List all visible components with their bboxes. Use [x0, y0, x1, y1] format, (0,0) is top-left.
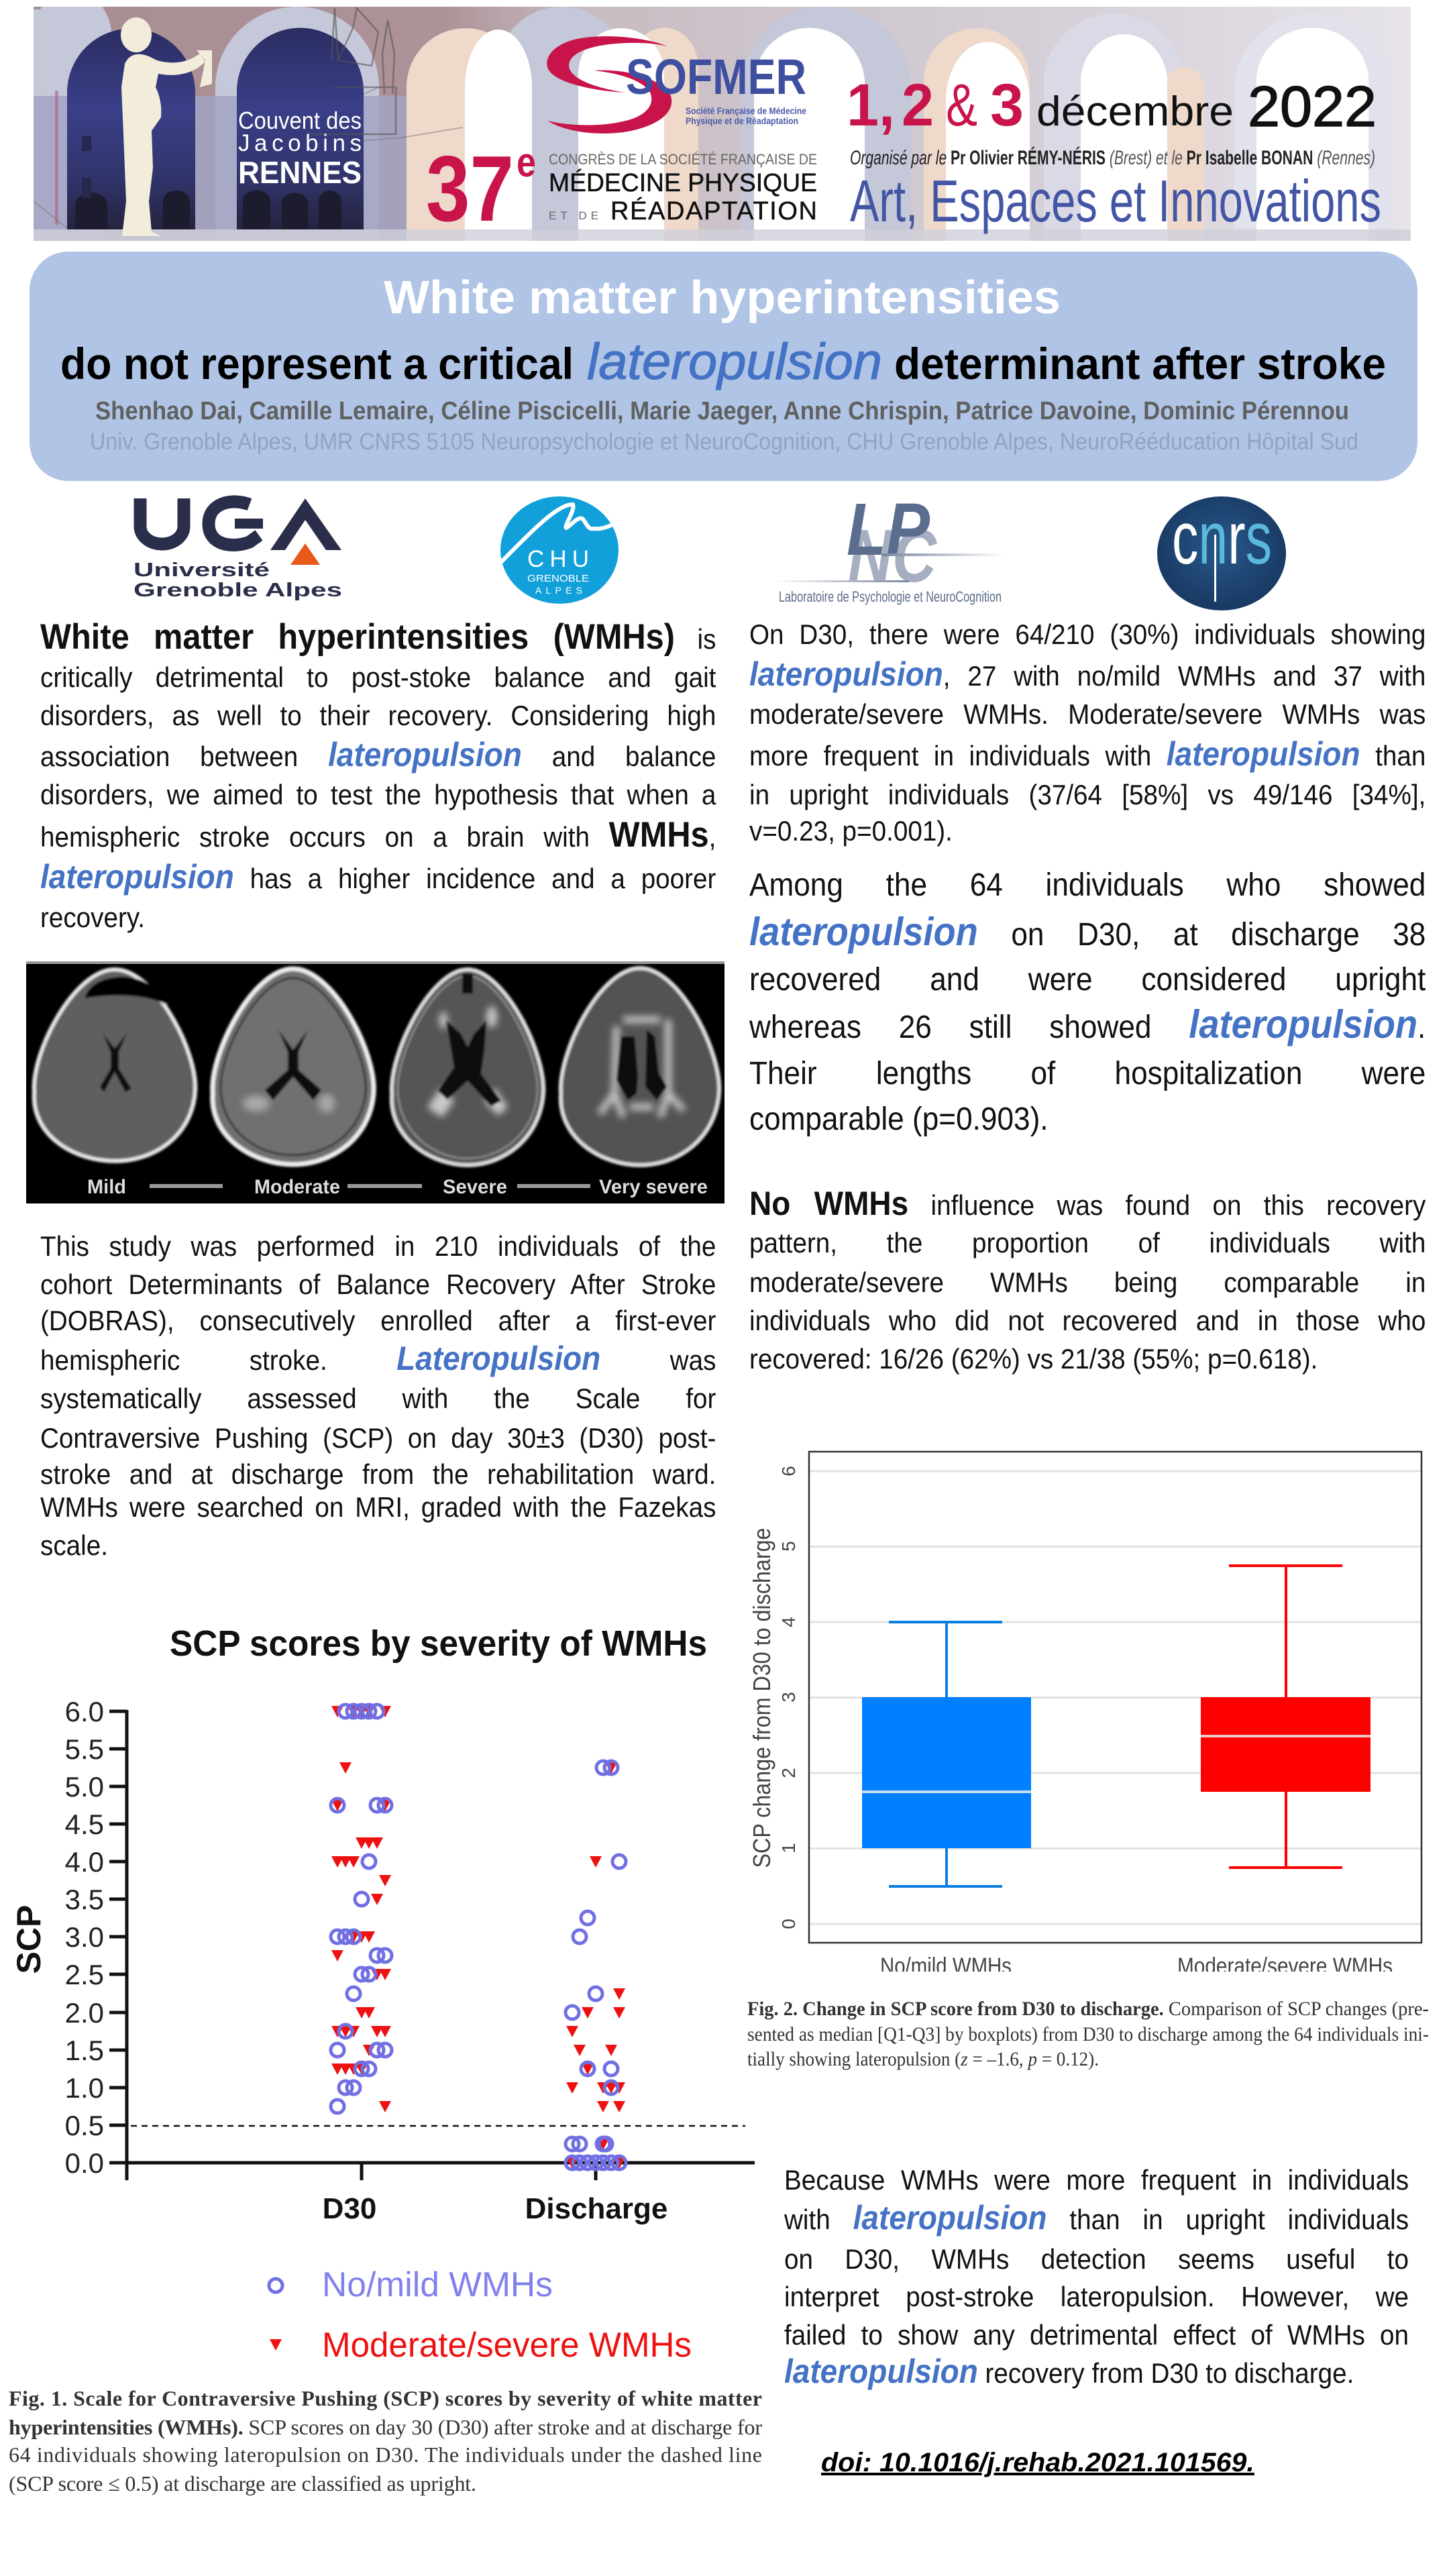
axis labels: 6 — [778, 1466, 799, 1477]
text block: conclusion: on D30, WMHs detection seems useful to — [784, 2243, 1409, 2275]
y tick labels: 5.5 — [65, 1733, 104, 1765]
axis labels: SCP change from D30 to discharge — [748, 1528, 775, 1868]
y tick labels: 4.0 — [65, 1846, 104, 1878]
y tick labels: 2.5 — [65, 1959, 104, 1990]
axes — [109, 1710, 755, 2180]
markers: no/mild — [331, 1705, 626, 2169]
logo: CHU Grenoble Alpes — [500, 496, 619, 604]
logo: UGA: Grenoble Alpes — [133, 580, 342, 601]
chart: boxplot SCP change — [747, 1450, 1429, 2070]
text block: introduction: recovery. — [40, 902, 145, 933]
text: 37e: e — [517, 140, 536, 186]
text: congress name — [549, 151, 817, 225]
legend — [269, 2265, 692, 2365]
text block: introduction — [40, 617, 716, 933]
text block: methods — [40, 1230, 716, 1561]
text: congress name: CONGRÈS DE LA SOCIÉTÉ FRANÇAISE DE — [549, 151, 817, 168]
logo: CHU Grenoble Alpes: ALPES — [535, 585, 582, 596]
y tick labels — [65, 1696, 104, 2179]
text block: results discharge: Among the 64 individuals who showed — [749, 867, 1426, 903]
x labels: Discharge — [525, 2192, 667, 2225]
text block: results discharge: recovered and were considered upright — [749, 962, 1426, 998]
y tick labels: 4.5 — [65, 1809, 104, 1840]
text: congress name: RÉADAPTATION — [610, 197, 817, 225]
text block: no WMHs influence: moderate/severe WMHs being comparable in — [749, 1267, 1426, 1298]
icon: statue — [121, 17, 212, 236]
text: dates: 3 — [990, 71, 1024, 138]
labels and arrows: Severe — [443, 1176, 507, 1198]
markers: moderate/severe — [331, 1706, 625, 2169]
text block: introduction: critically detrimental to post-stoke balance and gait — [40, 661, 716, 693]
text block: results D30: v=0.23, p=0.001). — [749, 815, 953, 847]
logo: LPNC — [779, 496, 1002, 605]
text block: conclusion — [784, 2164, 1409, 2390]
text block: methods: Contraversive Pushing (SCP) on day 30±3 (D30) post- — [40, 1422, 716, 1454]
y tick labels: 0.0 — [65, 2147, 104, 2179]
text block: introduction: disorders, as well to their recovery. Considering high — [40, 700, 716, 731]
brain: very severe — [561, 968, 719, 1165]
logo: UGA: Université — [133, 559, 270, 581]
text: congress name: ET DE — [549, 209, 598, 222]
logo: CNRS — [1157, 496, 1286, 610]
text block: methods: WMHs were searched on MRI, graded with the Fazekas — [40, 1491, 716, 1523]
text block: conclusion: interpret post-stroke lateropulsion. However, we — [784, 2281, 1409, 2312]
text block: no WMHs influence: No WMHs influence was found on this recovery — [749, 1185, 1426, 1222]
text block: methods: cohort Determinants of Balance Recovery After Stroke — [40, 1269, 716, 1300]
logo: SOFMER — [547, 36, 806, 133]
heading line 2 — [60, 333, 1386, 390]
text block: results discharge — [749, 867, 1426, 1137]
box: no/mild — [862, 1622, 1031, 1886]
icon: dark arches — [67, 28, 364, 229]
text block: conclusion: Because WMHs were more frequent in individuals — [784, 2164, 1409, 2196]
labels and arrows: Moderate — [254, 1176, 340, 1198]
text: dates: 1, — [847, 71, 895, 138]
logo: UGA — [133, 495, 342, 601]
caption: figure 2: Fig. 2. Change in SCP score from D30 to discharge. Comparison of SCP changes (pre- — [747, 1998, 1429, 2020]
peach arches — [407, 28, 1204, 241]
axis labels: 4 — [778, 1617, 799, 1627]
labels and arrows: Mild — [87, 1176, 126, 1198]
axis labels: Moderate/severe WMHs — [1177, 1953, 1393, 1979]
logo: CNRS: cnrs — [1172, 497, 1272, 580]
axis labels: 1 — [778, 1843, 799, 1854]
y tick labels: 2.0 — [65, 1997, 104, 2029]
text block: results discharge: comparable (p=0.903). — [749, 1102, 1049, 1137]
text block: no WMHs influence: individuals who did not recovered and in those who — [749, 1305, 1426, 1336]
axis labels: 2 — [778, 1768, 799, 1778]
figure: MRI Fazekas severity scale — [26, 961, 724, 1203]
x labels — [323, 2192, 667, 2225]
caption: figure 2: tially showing lateropulsion (z = –1.6, p = 0.12). — [747, 2048, 1099, 2070]
y tick labels: 5.0 — [65, 1771, 104, 1803]
caption: figure 1: Fig. 1. Scale for Contraversive Pushing (SCP) scores by severity of white matter — [9, 2386, 762, 2410]
caption: figure 1: hyperintensities (WMHs). SCP scores on day 30 (D30) after stroke and at discharge for — [9, 2415, 762, 2439]
text block: no WMHs influence: pattern, the proportion of individuals with — [749, 1227, 1426, 1258]
panel: title — [30, 252, 1417, 481]
text: dates — [847, 71, 1377, 139]
text block: no WMHs influence — [749, 1185, 1426, 1375]
caption: figure 2 — [747, 1998, 1429, 2070]
legend: No/mild WMHs — [322, 2265, 553, 2304]
heading line 2: lateropulsion — [587, 333, 882, 390]
text block: no WMHs influence: recovered: 16/26 (62%) vs 21/38 (55%; p=0.618). — [749, 1343, 1318, 1375]
text block: results D30: lateropulsion, 27 with no/mild WMHs and 37 with — [749, 655, 1426, 693]
brain: moderate — [213, 969, 374, 1165]
y tick labels: 3.0 — [65, 1921, 104, 1953]
brain: severe — [392, 969, 543, 1165]
logo: SOFMER: Société Française de Médecine — [686, 105, 806, 116]
affiliations: Univ. Grenoble Alpes, UMR CNRS 5105 Neuropsychologie et NeuroCognition, CHU Grenoble Alpes, NeuroRééducation Hôpital Sud — [90, 429, 1358, 455]
text block: introduction: association between lateropulsion and balance — [40, 736, 716, 773]
axis labels: No/mild WMHs — [880, 1953, 1012, 1979]
text block: introduction: disorders, we aimed to test the hypothesis that when a — [40, 779, 716, 810]
text block: conclusion: lateropulsion recovery from D30 to discharge. — [784, 2353, 1354, 2390]
text block: results D30: more frequent in individuals with lateropulsion than — [749, 735, 1426, 773]
text block: results D30 — [749, 619, 1426, 847]
logo: SOFMER: SOFMER — [626, 49, 806, 105]
text block: conclusion: failed to show any detrimental effect of WMHs on — [784, 2319, 1409, 2351]
logo: CHU Grenoble Alpes: CHU — [527, 546, 589, 572]
heading line 2: do not represent a critical — [60, 339, 574, 388]
axis labels: 0 — [778, 1919, 799, 1929]
chart: SCP scatter — [9, 1623, 762, 2496]
text: dates: décembre — [1036, 89, 1234, 135]
labels and arrows — [87, 1176, 708, 1198]
logo: SOFMER: Physique et de Réadaptation — [686, 115, 798, 126]
text block: introduction: hemispheric stroke occurs on a brain with WMHs, — [40, 815, 716, 855]
text block: methods: hemispheric stroke. Lateropulsion was — [40, 1340, 716, 1377]
banner: SOFMER congress — [34, 7, 1411, 241]
text block: results discharge: Their lengths of hospitalization were — [749, 1056, 1426, 1091]
axis labels — [748, 1466, 1393, 1979]
text block: methods: systematically assessed with the Scale for — [40, 1383, 716, 1414]
text: 37e: 37 — [426, 137, 514, 241]
caption: figure 1: (SCP score ≤ 0.5) at discharge are classified as upright. — [9, 2471, 476, 2496]
white arches — [465, 28, 1368, 241]
text block: methods: stroke and at discharge from the rehabilitation ward. — [40, 1458, 716, 1490]
text block: methods: scale. — [40, 1529, 108, 1561]
heading line 1: White matter hyperintensities — [384, 271, 1061, 323]
caption: figure 1: 64 individuals showing lateropulsion on D30. The individuals under the dashed line — [9, 2443, 762, 2467]
y tick labels: 1.0 — [65, 2072, 104, 2104]
text: congress name: MÉDECINE PHYSIQUE — [549, 168, 817, 197]
y tick labels: 1.5 — [65, 2035, 104, 2066]
text block: methods: This study was performed in 210 individuals of the — [40, 1230, 716, 1262]
text: organisers: Organisé par le Pr Olivier RÉMY-NÉRIS (Brest) et le Pr Isabelle BONAN (Rennes) — [850, 146, 1375, 169]
text block: results D30: moderate/severe WMHs. Moderate/severe WMHs was — [749, 698, 1426, 730]
brain: mild — [34, 969, 195, 1161]
text: dates: 2 — [902, 71, 934, 138]
text block: results D30: On D30, there were 64/210 (30%) individuals showing — [749, 619, 1426, 650]
axis labels: 3 — [778, 1692, 799, 1703]
axis labels: 5 — [778, 1541, 799, 1552]
caption: figure 1 — [9, 2386, 762, 2496]
labels and arrows: Very severe — [599, 1176, 708, 1198]
legend: Moderate/severe WMHs — [322, 2326, 692, 2365]
text: dates: 2022 — [1248, 75, 1377, 139]
authors: Shenhao Dai, Camille Lemaire, Céline Piscicelli, Marie Jaeger, Anne Chrispin, Patrice Davoine, Dominic Pérennou — [95, 397, 1349, 425]
chart title: SCP scores by severity of WMHs — [170, 1623, 707, 1664]
text: DOI reference: doi: 10.1016/j.rehab.2021.101569. — [821, 2448, 1254, 2477]
text block: conclusion: with lateropulsion than in upright individuals — [784, 2199, 1409, 2237]
x labels: D30 — [323, 2192, 376, 2225]
text block: methods: (DOBRAS), consecutively enrolled after a first-ever — [40, 1305, 716, 1336]
text: venue — [238, 107, 362, 190]
y tick labels: 6.0 — [65, 1696, 104, 1727]
logo: CHU Grenoble Alpes: GRENOBLE — [527, 573, 589, 584]
text block: results discharge: whereas 26 still showed lateropulsion. — [749, 1002, 1426, 1046]
text block: introduction: lateropulsion has a higher incidence and a poorer — [40, 858, 716, 896]
text: dates: & — [946, 71, 977, 138]
text: venue: RENNES — [238, 155, 362, 190]
box: moderate/severe — [1201, 1566, 1371, 1868]
logo: LPNC: NC — [848, 515, 938, 598]
text block: introduction: White matter hyperintensities (WMHs) is — [40, 617, 716, 657]
text: venue: Couvent des — [238, 107, 362, 134]
text: venue: Jacobins — [238, 130, 362, 156]
icon: cathedral sketch — [309, 8, 396, 134]
text block: results discharge: lateropulsion on D30, at discharge 38 — [749, 910, 1426, 954]
icon: doorway arches — [75, 191, 341, 229]
lilac arches — [34, 0, 1392, 241]
heading line 2: determinant after stroke — [894, 339, 1386, 388]
y axis title: SCP — [10, 1905, 48, 1974]
y tick labels: 3.5 — [65, 1884, 104, 1915]
y tick labels: 0.5 — [65, 2110, 104, 2141]
text block: results D30: in upright individuals (37/64 [58%] vs 49/146 [34%], — [749, 779, 1426, 810]
